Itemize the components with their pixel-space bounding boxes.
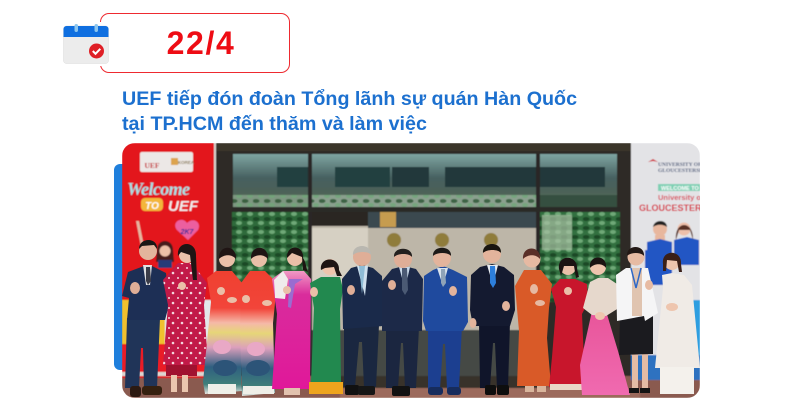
right Gloucestershire banner: WELCOME TO bbox=[661, 186, 700, 192]
page bbox=[63, 13, 700, 398]
building facade bbox=[215, 143, 632, 377]
banner raised arm bbox=[135, 220, 144, 246]
heading: tại TP.HCM đến thăm và làm việc bbox=[122, 113, 427, 135]
banner to badge bbox=[141, 198, 163, 211]
person 15: woman in white ao dai bbox=[655, 253, 700, 394]
banner students bbox=[645, 221, 699, 285]
date text: 22/4 bbox=[167, 25, 235, 61]
banner logo card bbox=[140, 152, 193, 172]
person 9: man in royal blue suit bbox=[423, 248, 468, 395]
banner student bbox=[156, 241, 174, 268]
person 13: woman in light top and pink skirt bbox=[580, 258, 630, 395]
banner partner name: KOREA bbox=[178, 160, 195, 165]
person 12: woman in red ao dai bbox=[549, 258, 588, 390]
date box bbox=[100, 13, 290, 73]
person 4: woman in floral red ao dai bbox=[240, 248, 277, 396]
person 5: woman in pink hanbok bbox=[272, 248, 311, 395]
banner heart badge bbox=[175, 220, 199, 240]
banner welcome text: Welcome bbox=[127, 179, 190, 199]
blue accent strip behind photo bbox=[114, 164, 144, 370]
person 8: man in dark suit bbox=[382, 249, 423, 396]
person 6: woman in green ao dai bbox=[309, 259, 343, 394]
person 7: man in dark suit bbox=[342, 246, 383, 395]
banner UEF text: UEF bbox=[168, 198, 199, 215]
person 11: woman in orange ao dai bbox=[515, 248, 552, 392]
left red welcome banner bbox=[122, 143, 216, 378]
icon: calendar with check mark bbox=[63, 22, 109, 66]
right Gloucestershire banner bbox=[630, 143, 700, 381]
person 1: man in navy suit bbox=[122, 240, 169, 397]
banner logo mark bbox=[171, 158, 178, 165]
banner to text: TO bbox=[145, 201, 159, 212]
floor bbox=[122, 376, 700, 398]
banner logo text: UEF bbox=[144, 161, 160, 170]
banner heart text: 2K7 bbox=[180, 229, 195, 236]
person 14: woman in white blazer and black skirt bbox=[616, 247, 658, 393]
person 3: woman in floral red ao dai bbox=[203, 248, 242, 394]
heading: UEF tiếp đón đoàn Tổng lãnh sự quán Hàn Quốc bbox=[122, 88, 577, 110]
person 2: woman in crimson patterned dress bbox=[163, 244, 208, 392]
heading bbox=[122, 88, 577, 135]
photo: group portrait at UEF entrance bbox=[122, 143, 700, 398]
person 10: man in black suit with blue tie bbox=[470, 244, 515, 395]
